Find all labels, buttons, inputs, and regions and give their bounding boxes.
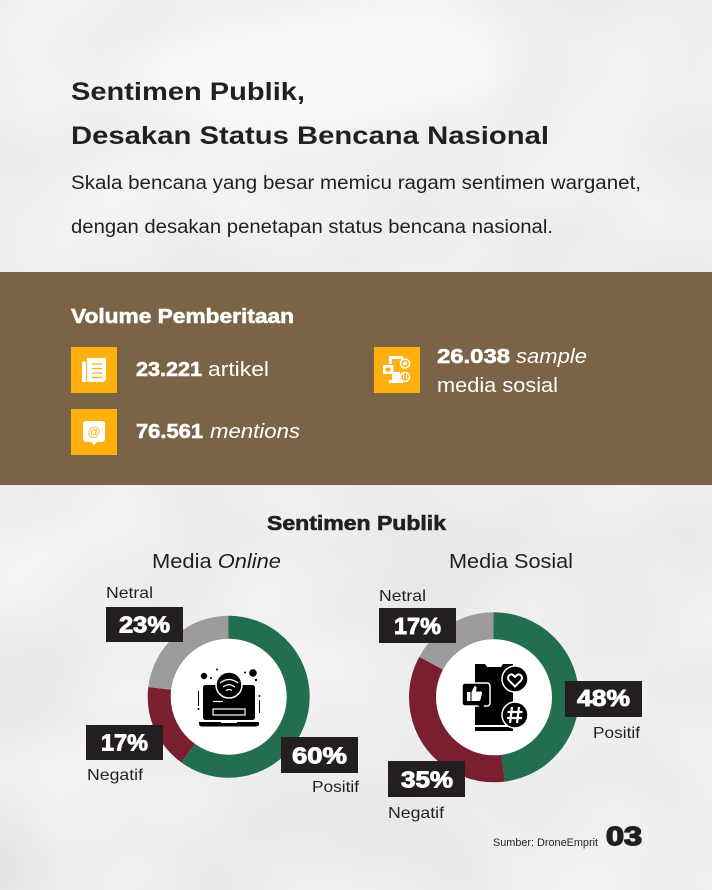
icon: phone social <box>462 664 528 731</box>
label: netral 23%: Netral <box>106 585 153 602</box>
label: netral 23%: 23% <box>119 612 170 638</box>
stat: mentions: mentions <box>210 421 300 443</box>
label: negatif 35%: Negatif <box>388 805 445 822</box>
label: positif 48% <box>565 681 642 742</box>
stat: sample media sosial: 26.038 <box>437 346 510 368</box>
label: netral 17%: Netral <box>379 588 426 605</box>
icon: mention bubble: @ <box>87 424 101 439</box>
icon: newspaper <box>71 347 117 393</box>
label: positif 60%: 60% <box>292 742 347 768</box>
page number: 03 <box>606 821 642 851</box>
heading: media sosial: Media Sosial <box>449 551 573 573</box>
title <box>71 78 549 150</box>
label: positif 60% <box>281 737 360 796</box>
label: netral 23% <box>106 585 183 642</box>
label: positif 48%: 48% <box>577 685 630 711</box>
intro text: dengan desakan penetapan status bencana nasional. <box>71 217 553 238</box>
stat: artikel: artikel <box>208 359 269 381</box>
title: Desakan Status Bencana Nasional <box>71 122 549 150</box>
icon: social media phone <box>374 347 420 393</box>
label: negatif 17%: 17% <box>101 730 148 756</box>
source note: Sumber: DroneEmprit <box>493 837 598 849</box>
heading: media online: Media Online <box>152 551 281 573</box>
label: negatif 35%: 35% <box>401 766 453 792</box>
label: netral 17%: 17% <box>394 613 441 639</box>
intro text: Skala bencana yang besar memicu ragam sentimen warganet, <box>71 173 641 194</box>
stat: sample media sosial <box>437 346 587 397</box>
label: positif 60%: Positif <box>312 779 360 796</box>
donut chart: media sosial <box>379 588 642 822</box>
label: negatif 35% <box>388 761 465 822</box>
donut chart: media online <box>86 585 360 796</box>
icon: laptop wifi <box>198 668 260 726</box>
stat: mentions: 76.561 <box>136 421 203 443</box>
title: Sentimen Publik, <box>71 78 305 106</box>
stat: artikel: 23.221 <box>136 359 202 381</box>
icon: mention bubble <box>71 409 117 455</box>
stat: sample media sosial: sample <box>516 346 587 368</box>
stat: sample media sosial: media sosial <box>437 375 558 397</box>
label: negatif 17% <box>86 725 163 784</box>
heading: sentimen publik: Sentimen Publik <box>267 513 447 535</box>
label: negatif 17%: Negatif <box>87 767 144 784</box>
panel heading: Volume Pemberitaan <box>71 306 294 328</box>
label: netral 17% <box>379 588 456 643</box>
panel: volume pemberitaan <box>0 272 712 485</box>
label: positif 48%: Positif <box>593 725 641 742</box>
intro text <box>71 173 641 238</box>
